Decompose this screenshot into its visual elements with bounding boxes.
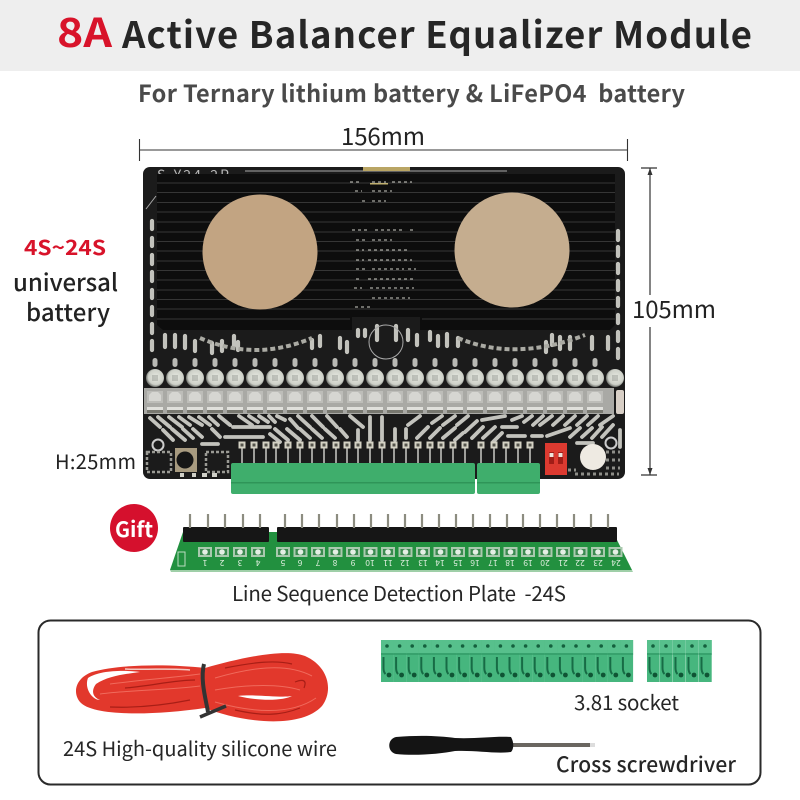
plate numbers [202,557,621,569]
center silk marks [200,335,585,350]
screwdriver caption: Cross screwdriver [556,749,736,779]
plate numbers: 4 [255,557,260,569]
height dimension: 105mm [632,290,716,325]
plate numbers: 9 [350,557,355,569]
plate numbers: 14 [435,557,445,569]
plate numbers: 17 [488,557,498,569]
socket caption: 3.81 socket [574,686,679,716]
plate numbers: 19 [523,557,533,569]
header band [0,0,800,71]
height dimension [632,168,716,475]
red silicone wire [76,653,328,721]
title: 8A: 8A [57,1,112,59]
red DIP switch [545,443,567,475]
callout: universal battery: 4S~24S [24,231,106,261]
plate numbers: 15 [453,557,463,569]
plate numbers: 11 [383,557,393,569]
detection plate photo [170,514,633,572]
plate numbers: 20 [540,557,550,569]
left reset button [147,440,228,475]
plate numbers: 16 [470,557,480,569]
plate numbers: 6 [297,557,302,569]
edge and notch pads [152,221,618,358]
connector pads [238,442,534,464]
board base [143,167,625,479]
capacitor stems [152,358,598,367]
height label: H:25mm [55,446,136,475]
thermal pad right [454,192,570,308]
center component marks [350,182,416,307]
plate numbers: 24 [611,557,621,569]
plate numbers: 21 [558,557,568,569]
subtitle: For Ternary lithium battery & LiFePO4 battery [138,75,686,109]
callout: universal battery: battery [26,293,110,328]
cross screwdriver [389,736,595,755]
pin headers [183,514,617,542]
plate numbers: 5 [280,557,285,569]
model silk text: S-Y24-2P [157,165,229,185]
callout: universal battery [13,231,118,328]
short green socket [647,640,712,682]
capacitors [146,369,624,387]
plate caption: Line Sequence Detection Plate -24S [232,577,566,607]
white button [568,438,620,474]
plate numbers: 23 [593,557,603,569]
diagonal solder pads [150,416,620,447]
gift badge [110,504,158,552]
plate numbers: 2 [219,557,224,569]
title: Active Balancer Equalizer Module [121,6,752,59]
long green socket [381,640,633,682]
plate numbers: 7 [315,557,320,569]
heatsink [157,167,615,330]
balancer board photo [143,165,625,494]
plate numbers: 13 [418,557,428,569]
silver component band [144,388,624,414]
plate numbers: 18 [505,557,515,569]
top connector [363,167,410,171]
thermal pad left [202,194,318,310]
plate [170,532,632,570]
callout: universal battery: universal [13,263,118,298]
gift badge: Gift [115,514,153,544]
width dimension: 156mm [341,117,425,152]
plate numbers: 1 [202,557,207,569]
width dimension [139,117,628,161]
plate numbers: 12 [400,557,410,569]
LED pads [198,547,622,557]
plate numbers: 22 [575,557,585,569]
wire caption: 24S High-quality silicone wire [63,733,337,762]
accessories panel [38,620,760,784]
plate numbers: 10 [365,557,375,569]
green terminal connector [231,463,540,494]
plate numbers: 8 [332,557,337,569]
plate numbers: 3 [237,557,242,569]
